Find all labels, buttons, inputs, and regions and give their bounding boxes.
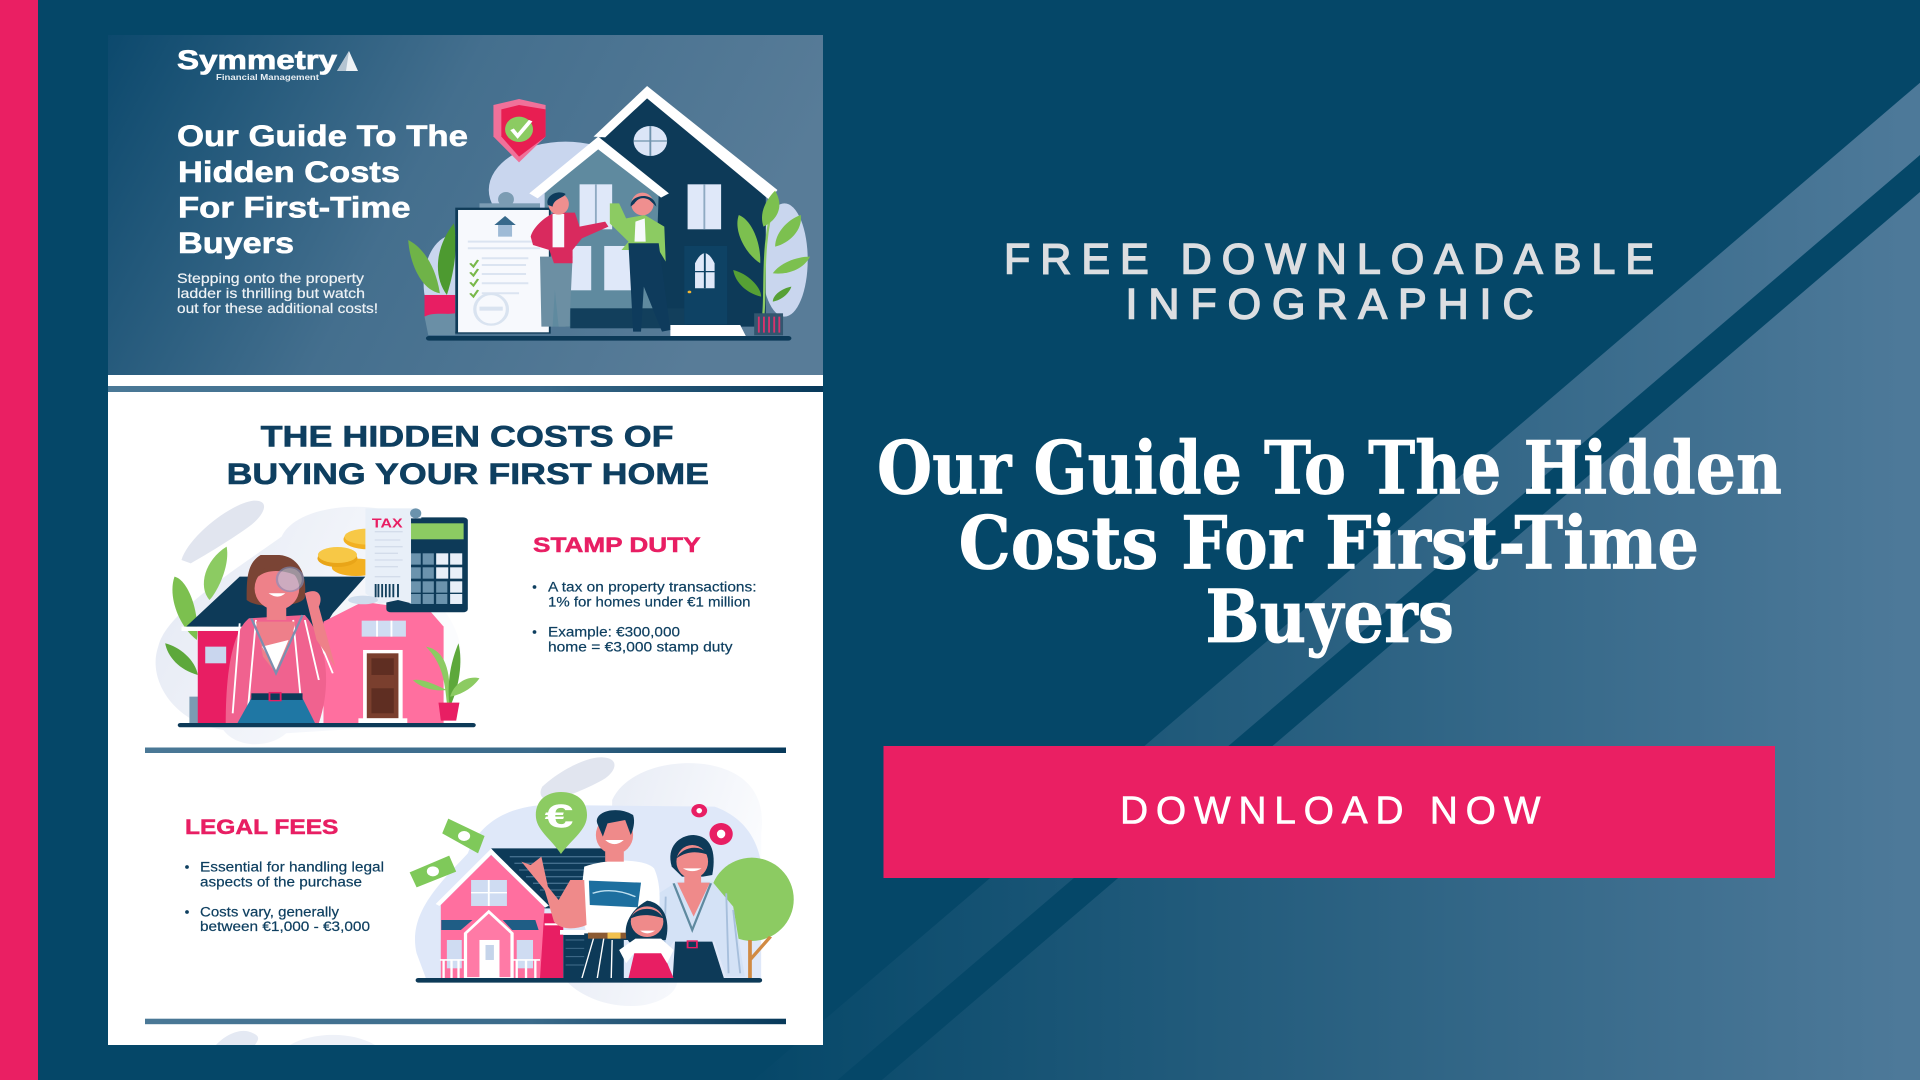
poster headline <box>227 421 709 491</box>
header subtitle <box>177 270 378 316</box>
main title: Our Guide To The Hidden <box>877 426 1782 512</box>
icon: green euro pin <box>536 792 587 854</box>
poster headline: BUYING YOUR FIRST HOME <box>227 458 709 491</box>
header title: Our Guide To The <box>177 120 468 153</box>
legal fees bullets: Costs vary, generally <box>200 905 339 920</box>
kicker text: INFOGRAPHIC <box>1126 280 1534 328</box>
icon: pink euro coins <box>691 804 733 845</box>
legal fees bullets <box>185 860 384 934</box>
main title: Buyers <box>1205 574 1454 660</box>
diagonal background bands <box>754 83 1920 1080</box>
main title: Costs For First-Time <box>959 500 1699 586</box>
header subtitle: Stepping onto the property <box>177 270 364 286</box>
logo <box>177 45 358 82</box>
header subtitle: ladder is thrilling but watch <box>177 285 365 301</box>
stamp duty bullets: 1% for homes under €1 million <box>548 595 750 610</box>
main title <box>877 426 1782 660</box>
poster header panel <box>108 35 823 375</box>
illustration: woman with magnifier, pink house and calculator <box>156 501 479 744</box>
header title: Hidden Costs <box>178 156 400 189</box>
kicker text: FREE DOWNLOADABLE <box>1004 236 1654 284</box>
header subtitle: out for these additional costs! <box>177 300 378 316</box>
header title: For First-Time <box>178 192 410 224</box>
infographic preview panel <box>108 35 823 1045</box>
icon: security shield <box>493 99 546 162</box>
illustration: woman with magnifier, pink house and calculator: TAX <box>372 516 403 531</box>
stamp duty bullets: A tax on property transactions: <box>548 580 756 595</box>
header title <box>177 120 468 260</box>
stamp duty bullets: Example: €300,000 <box>548 625 680 640</box>
poster headline: THE HIDDEN COSTS OF <box>261 421 674 454</box>
download button <box>884 746 1775 878</box>
pink side strip <box>0 0 38 1080</box>
section divider <box>145 1019 786 1024</box>
section divider <box>145 748 786 753</box>
poster divider band <box>108 386 823 392</box>
header background <box>108 35 823 375</box>
legal fees section <box>185 757 794 1006</box>
kicker text <box>1004 236 1654 328</box>
illustration: family, pink house and tree <box>410 757 794 1006</box>
stamp duty bullets: home = €3,000 stamp duty <box>548 640 733 655</box>
next section blobs (cropped) <box>216 1031 375 1045</box>
heading: stamp duty: STAMP DUTY <box>533 534 701 557</box>
header title: Buyers <box>178 227 294 260</box>
logo: Symmetry <box>177 45 337 75</box>
logo: Financial Management <box>216 72 319 82</box>
stamp duty bullets <box>533 580 756 655</box>
icon: banknotes <box>410 819 485 887</box>
icon: green euro pin: € <box>545 797 574 835</box>
legal fees bullets: between €1,000 - €3,000 <box>200 919 370 934</box>
legal fees bullets: Essential for handling legal <box>200 860 384 875</box>
stamp duty section <box>156 501 756 744</box>
download panel <box>877 236 1782 878</box>
heading: legal fees: LEGAL FEES <box>185 816 338 839</box>
illustration: house, couple and clipboard <box>408 86 810 341</box>
download button: DOWNLOAD NOW <box>1120 790 1541 833</box>
poster white sheet <box>108 375 823 1045</box>
legal fees bullets: aspects of the purchase <box>200 875 362 890</box>
